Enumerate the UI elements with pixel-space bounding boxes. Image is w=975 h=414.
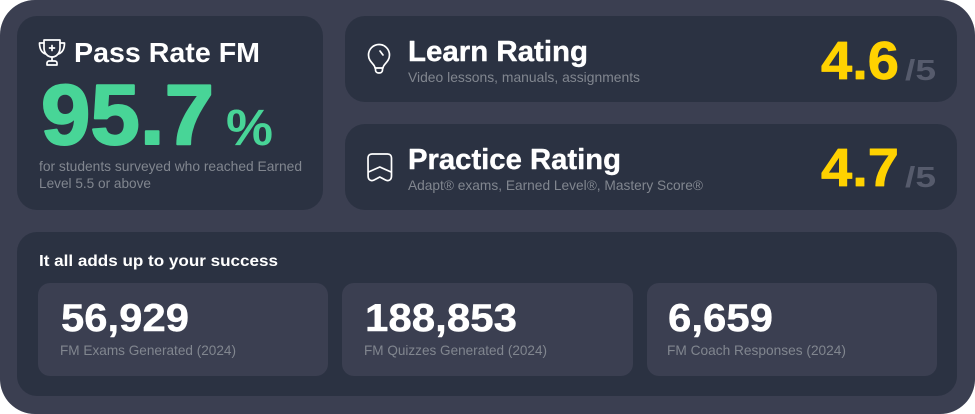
heading: It all adds up: It all adds up to your success [39,253,278,270]
panel: success stats [17,232,957,396]
card: quizzes generated [342,283,633,376]
description: Level 5.5 or above [39,175,151,191]
rating: 4.7 out of 5: 4.7 [821,138,899,198]
stat: 95.7 percent: 95.7 [41,68,214,163]
description [39,158,302,191]
card: coach responses: FM Coach Responses (2024) [667,342,846,358]
rating: 4.7 out of 5: /5 [905,162,936,194]
panel: learn rating [345,16,957,102]
icon: trophy [40,40,64,65]
rating: 4.6 out of 5: 4.6 [821,31,899,91]
rating: 4.7 out of 5 [821,138,936,198]
rating: 4.6 out of 5 [821,31,936,91]
heading: Pass Rate FM: Pass Rate FM [74,37,260,68]
heading: Learn Rating: Learn Rating [408,36,588,68]
card: exams generated: FM Exams Generated (2024) [60,342,236,358]
description: for students surveyed who reached Earned [39,158,302,174]
card: quizzes generated: 188,853 [365,297,517,340]
icon: light bulb [368,44,390,73]
card: coach responses: 6,659 [668,297,773,340]
icon: bookmark [368,154,392,181]
subtext: Video lessons, manuals, assignments [408,69,640,85]
heading: Practice Rating: Practice Rating [408,144,621,176]
subtext: Adapt® exams, Earned Level®, Mastery Score® [408,177,704,193]
card: exams generated: 56,929 [61,297,189,340]
card: quizzes generated: FM Quizzes Generated (2024) [364,342,547,358]
panel: practice rating [345,124,957,210]
panel: pass rate [17,16,323,210]
rating: 4.6 out of 5: /5 [905,55,936,87]
stat: 95.7 percent: % [226,99,273,156]
card: coach responses [647,283,937,376]
card: exams generated [38,283,328,376]
